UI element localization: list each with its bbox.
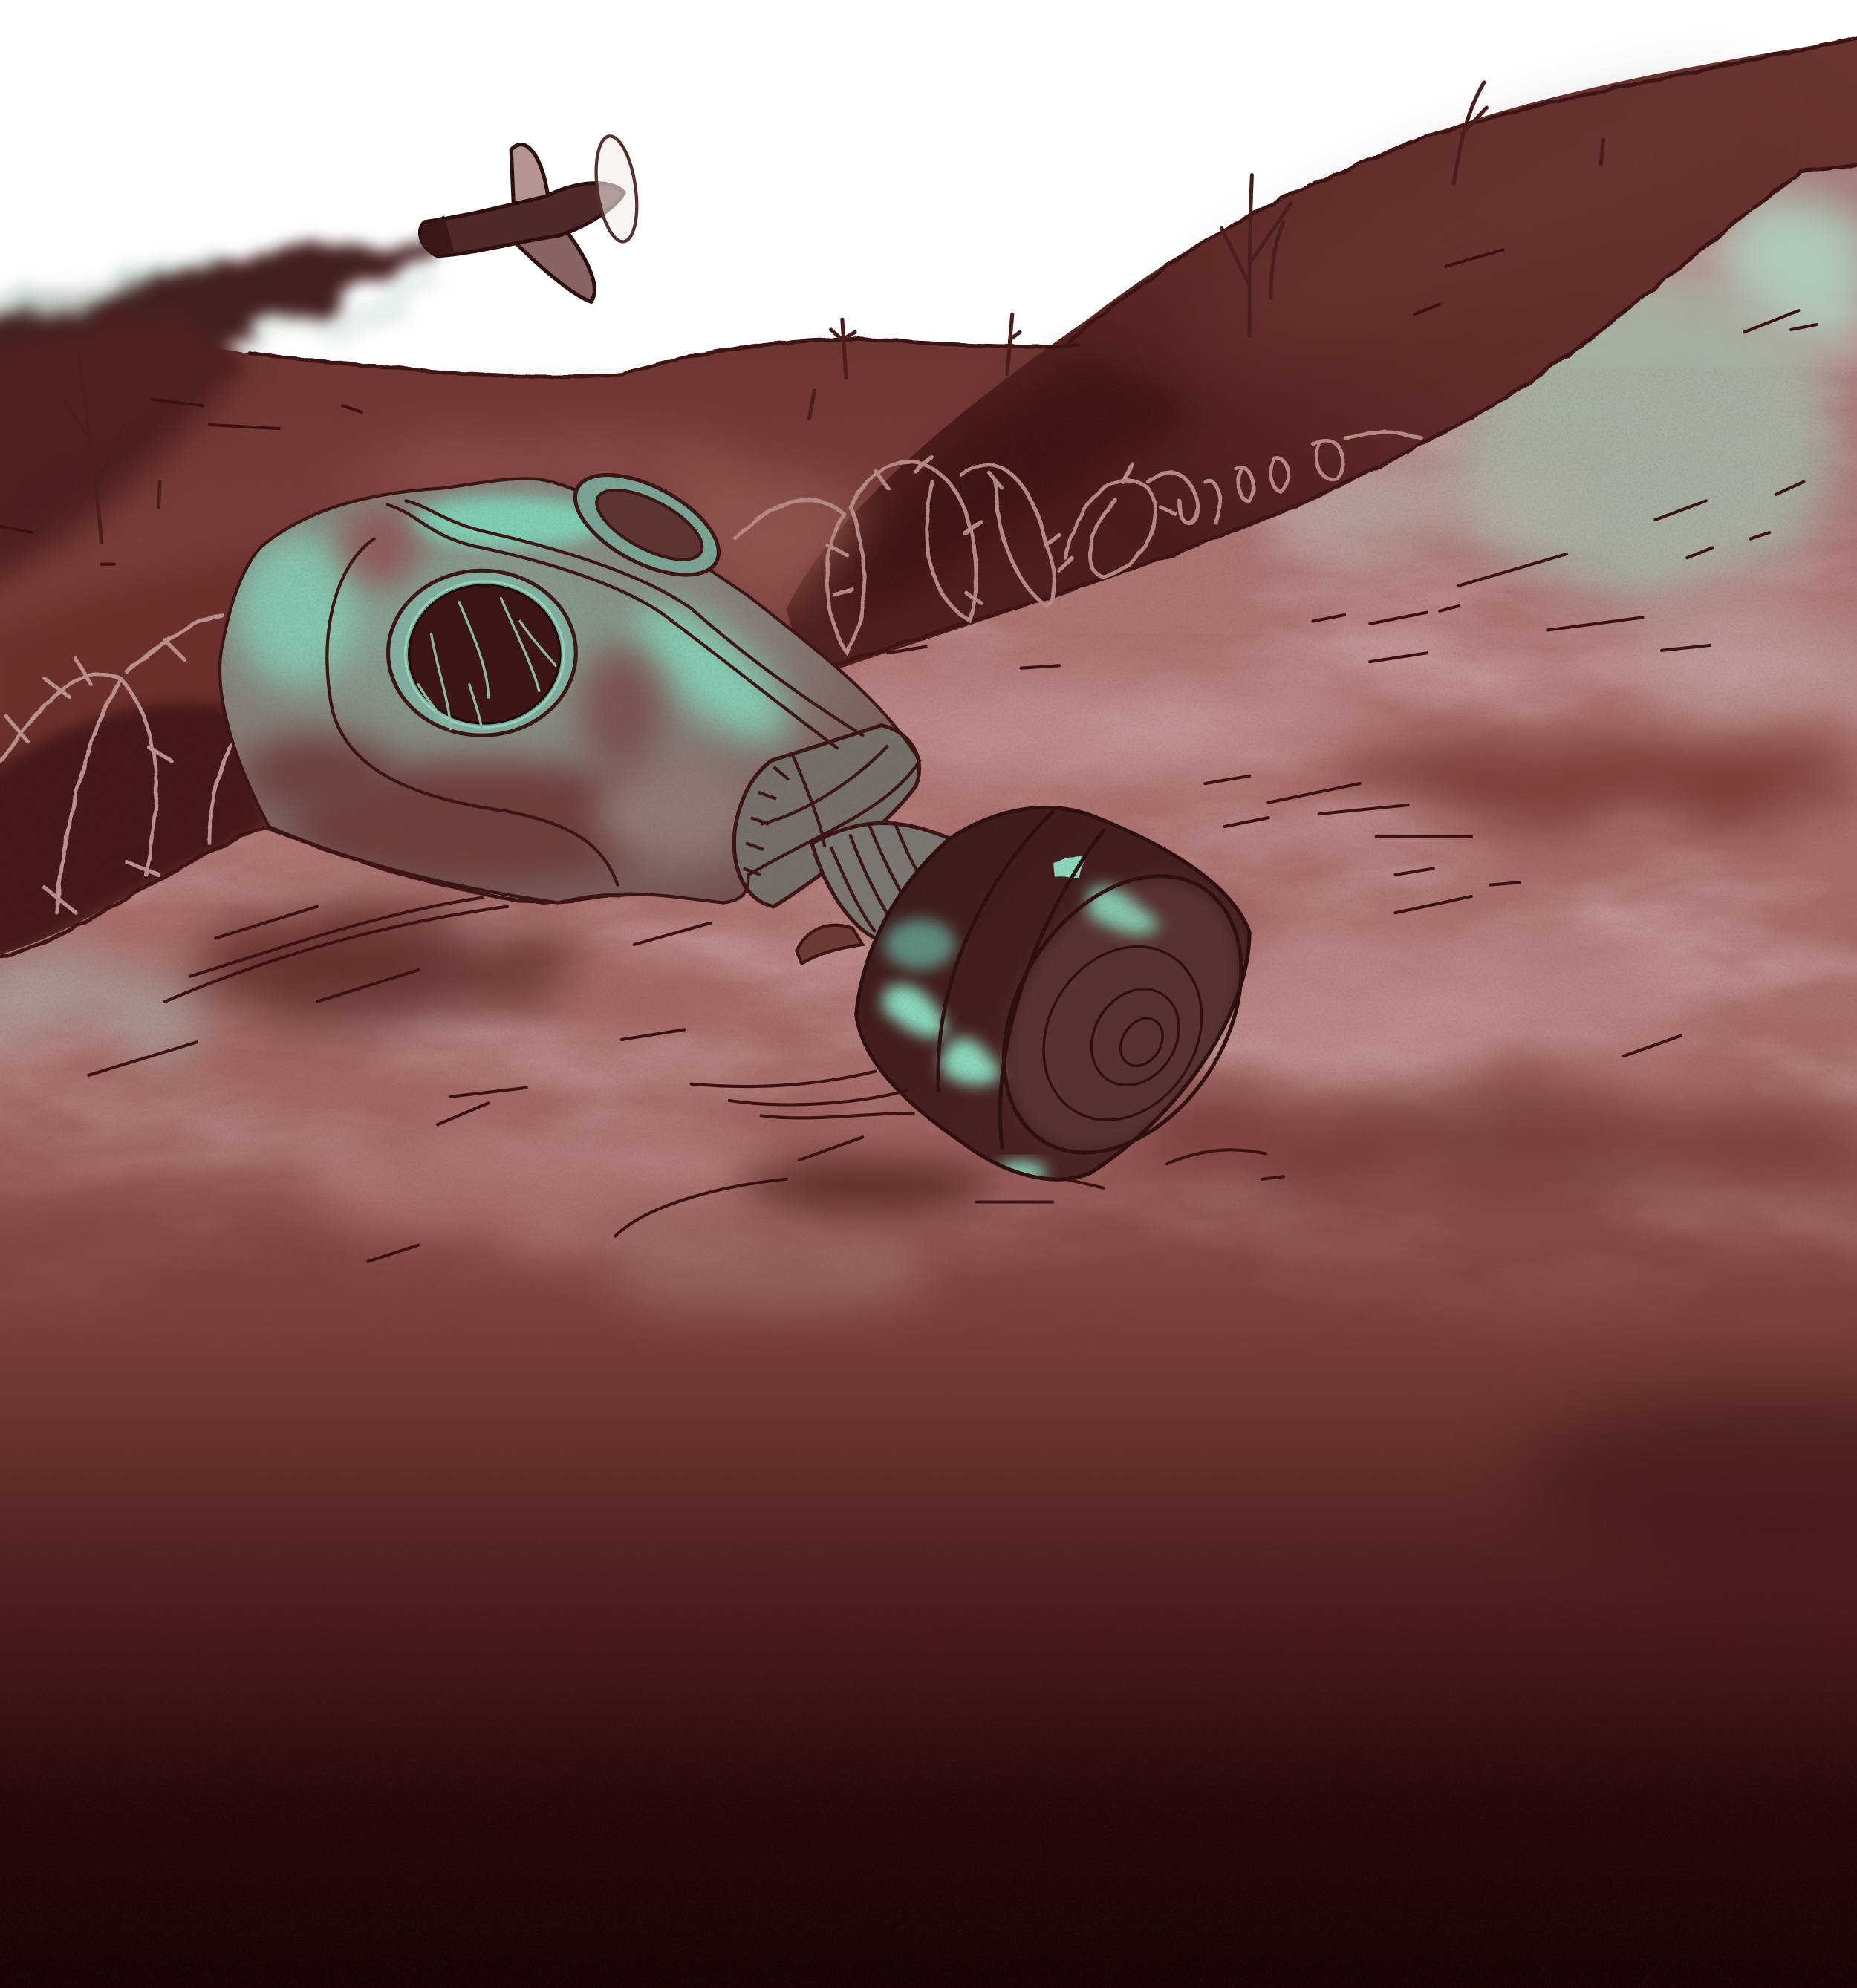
face piece <box>220 478 920 903</box>
dark smoke trail <box>0 242 444 507</box>
tab <box>796 925 862 964</box>
face mottling <box>235 497 807 887</box>
sky <box>0 0 1857 532</box>
dead shrubs <box>63 82 1603 543</box>
canister <box>856 807 1290 1196</box>
left dark ridge <box>0 310 292 966</box>
hose collar <box>734 726 920 907</box>
hose <box>812 823 952 938</box>
hill shading <box>317 72 1761 608</box>
hose ribs <box>744 746 923 932</box>
face seam lines <box>220 478 920 903</box>
eyepiece <box>388 570 576 735</box>
ridge ink lines <box>0 38 1857 957</box>
ground mottling <box>0 165 1857 1572</box>
canister outlines <box>856 807 1290 1196</box>
right ridge <box>787 33 1857 710</box>
far hill <box>0 339 1269 1014</box>
plane <box>420 134 643 302</box>
canister highlights <box>882 837 1286 1192</box>
barbed wire left <box>0 615 235 913</box>
gas mask <box>220 454 952 964</box>
ground ticks <box>0 250 1816 1262</box>
top valve collar <box>559 454 734 596</box>
barbed wire right <box>735 431 1421 653</box>
